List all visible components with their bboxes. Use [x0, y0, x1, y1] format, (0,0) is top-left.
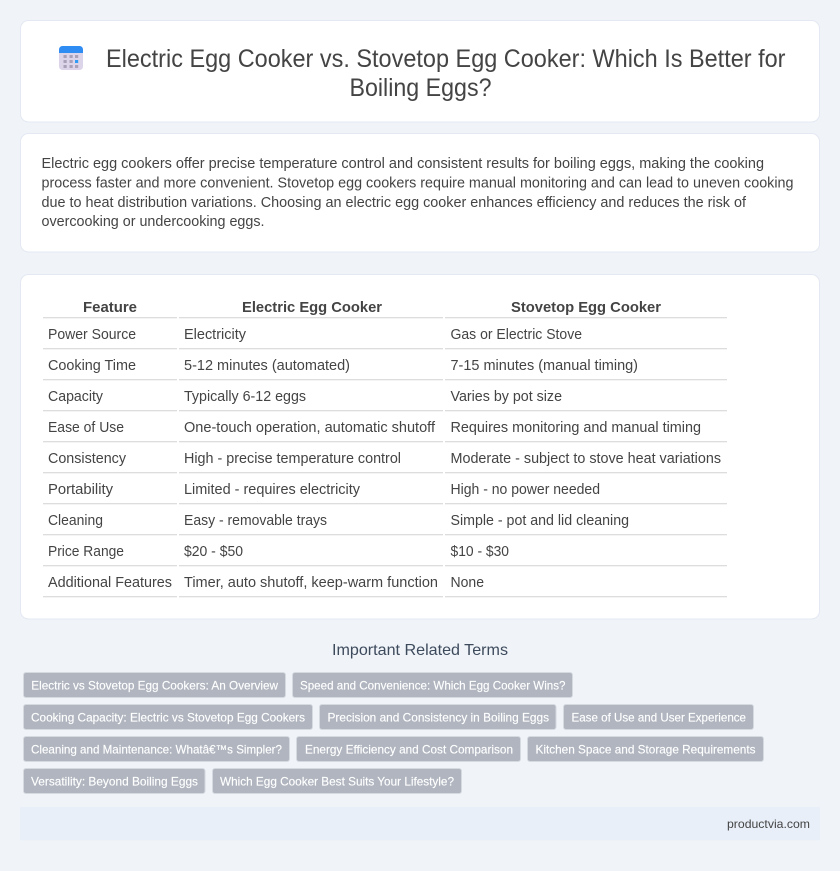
tag: versatility: [24, 768, 205, 794]
tag: speed and convenience: Speed and Convenience: Which Egg Cooker Wins?: [300, 678, 566, 692]
panel: title header: [20, 20, 820, 122]
table header row: Stovetop Egg Cooker: [511, 299, 661, 316]
tag: cleaning and maintenance: Cleaning and Maintenance: Whatâ€™s Simpler?: [31, 742, 282, 756]
table row: capacity: [43, 389, 727, 411]
panel: comparison table: [20, 274, 820, 619]
table row: additional features: None: [450, 575, 484, 591]
table row: power source: Gas or Electric Stove: [450, 327, 582, 343]
table row: price range: [43, 544, 727, 566]
tag: cooking capacity: [24, 704, 312, 730]
table row: cooking time: Cooking Time: [48, 358, 136, 374]
table row: cleaning: Easy - removable trays: [184, 513, 327, 529]
tag: precision and consistency: [320, 704, 556, 730]
tag list: related terms: [24, 672, 764, 794]
table row: capacity: Typically 6-12 eggs: [184, 389, 306, 405]
table row: portability: Portability: [48, 482, 114, 498]
table row: price range: $20 - $50: [184, 544, 243, 560]
panel: description: [20, 134, 820, 252]
table row: ease of use: Ease of Use: [48, 420, 124, 436]
tag: lifestyle: Which Egg Cooker Best Suits Your Lifestyle?: [220, 774, 454, 788]
table header row: Electric Egg Cooker: [242, 299, 382, 316]
table row: additional features: Additional Features: [48, 575, 172, 591]
title: [106, 45, 786, 102]
table row: consistency: [43, 451, 727, 473]
table row: cleaning: Cleaning: [48, 513, 103, 529]
table row: price range: $10 - $30: [450, 544, 509, 560]
table row: ease of use: Requires monitoring and manual timing: [450, 420, 701, 436]
tag: speed and convenience: [292, 672, 572, 698]
text block: description: [42, 156, 794, 230]
table row: portability: High - no power needed: [450, 482, 600, 498]
text block: description: due to heat distribution variations. Choosing an electric egg cooker enhances efficiency and reduces the risk of: [42, 195, 747, 211]
tag: overview: [24, 672, 286, 698]
table header row: [43, 299, 727, 318]
table row: price range: Price Range: [48, 544, 124, 560]
table row: portability: Limited - requires electricity: [184, 482, 361, 498]
table row: consistency: Moderate - subject to stove heat variations: [450, 451, 721, 467]
table row: capacity: Capacity: [48, 389, 104, 405]
table row: cooking time: [43, 358, 727, 380]
footer: [20, 807, 820, 840]
table row: cleaning: [43, 513, 727, 535]
tag: energy efficiency: Energy Efficiency and Cost Comparison: [305, 742, 513, 756]
footer: productvia.com: [727, 817, 810, 831]
table row: power source: Power Source: [48, 327, 136, 343]
tag: cooking capacity: Cooking Capacity: Electric vs Stovetop Egg Cookers: [31, 710, 305, 724]
tag: lifestyle: [212, 768, 462, 794]
title: Boiling Eggs?: [350, 74, 492, 102]
tag: precision and consistency: Precision and Consistency in Boiling Eggs: [328, 710, 549, 724]
text block: description: overcooking or undercooking eggs.: [42, 214, 264, 230]
table row: power source: Electricity: [184, 327, 247, 343]
table row: power source: [43, 327, 727, 349]
tag: ease of use: [564, 704, 754, 730]
table row: additional features: [43, 575, 727, 597]
table row: ease of use: [43, 420, 727, 442]
table row: ease of use: One-touch operation, automatic shutoff: [184, 420, 436, 436]
table row: cooking time: 5-12 minutes (automated): [184, 358, 350, 374]
table row: cooking time: 7-15 minutes (manual timing): [450, 358, 638, 374]
icon: calendar: [59, 46, 83, 70]
tag: overview: Electric vs Stovetop Egg Cookers: An Overview: [31, 678, 278, 692]
tag: versatility: Versatility: Beyond Boiling Eggs: [31, 774, 198, 788]
tag: kitchen space: [528, 736, 764, 762]
table row: consistency: High - precise temperature control: [184, 451, 401, 467]
table row: capacity: Varies by pot size: [450, 389, 562, 405]
tag: cleaning and maintenance: [24, 736, 290, 762]
tag: kitchen space: Kitchen Space and Storage Requirements: [536, 742, 756, 756]
table row: cleaning: Simple - pot and lid cleaning: [450, 513, 629, 529]
table header row: Feature: [83, 299, 137, 316]
title: Electric Egg Cooker vs. Stovetop Egg Cooker: Which Is Better for: [106, 45, 786, 73]
tag: energy efficiency: [296, 736, 520, 762]
table row: portability: [43, 482, 727, 504]
heading: important related terms: Important Related Terms: [332, 642, 508, 659]
table row: consistency: Consistency: [48, 451, 127, 467]
tag: ease of use: Ease of Use and User Experience: [572, 710, 746, 724]
text block: description: process faster and more convenient. Stovetop egg cookers require manual monitoring and can lead to uneven cooking: [42, 176, 794, 192]
text block: description: Electric egg cookers offer precise temperature control and consistent results for boiling eggs, making the cooking: [42, 156, 764, 172]
table row: additional features: Timer, auto shutoff, keep-warm function: [184, 575, 438, 591]
